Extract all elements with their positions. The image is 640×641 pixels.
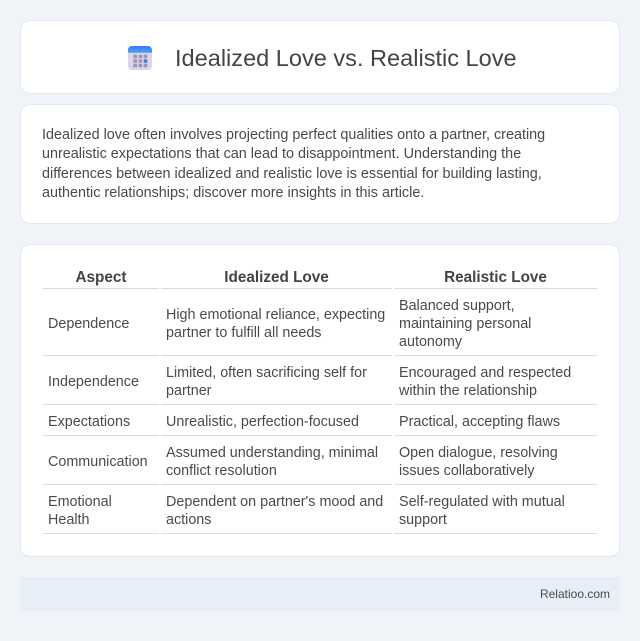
title: Idealized Love vs. Realistic Love	[175, 45, 517, 71]
row: Emotional Health: Dependent on partner's mood and	[166, 494, 383, 510]
icon: calendar	[128, 46, 152, 70]
row: Communication: Open dialogue, resolving	[399, 445, 558, 461]
panel: introduction	[20, 104, 620, 224]
row: Emotional Health: Health	[48, 512, 89, 528]
footer text: Relatioo.com	[540, 587, 610, 601]
row: Dependence: High emotional reliance, expecting	[166, 307, 385, 323]
row: Dependence: Dependence	[48, 316, 129, 332]
row: Independence: Limited, often sacrificing self for	[166, 365, 367, 381]
table heading: Aspect: Aspect	[75, 269, 126, 286]
row: Dependence: partner to fulfill all needs	[166, 325, 321, 341]
row: Independence: Encouraged and respected	[399, 365, 571, 381]
row: Communication	[48, 445, 558, 479]
row: Emotional Health: Self-regulated with mutual	[399, 494, 565, 510]
introduction text	[42, 127, 545, 201]
row: Dependence: maintaining personal	[399, 316, 531, 332]
introduction text: unrealistic expectations that can lead to disappointment. Understanding the	[42, 146, 521, 162]
row: Independence: partner	[166, 383, 211, 399]
footer bar	[20, 577, 620, 611]
row: Emotional Health: actions	[166, 512, 211, 528]
row: Communication: conflict resolution	[166, 463, 277, 479]
row: Expectations	[48, 414, 560, 430]
row: Communication: issues collaboratively	[399, 463, 535, 479]
introduction text: differences between idealized and realistic love is essential for building lasting,	[42, 166, 542, 182]
table heading: Realistic Love: Realistic Love	[444, 269, 547, 286]
row: Expectations: Expectations	[48, 414, 130, 430]
row: Emotional Health: support	[399, 512, 447, 528]
row: Expectations: Practical, accepting flaws	[399, 414, 560, 430]
row: Dependence	[48, 298, 531, 350]
row: Expectations: Unrealistic, perfection-focused	[166, 414, 359, 430]
row: Dependence: autonomy	[399, 334, 462, 350]
row: Emotional Health	[48, 494, 565, 528]
introduction text: authentic relationships; discover more insights in this article.	[42, 185, 424, 201]
row: Communication: Assumed understanding, minimal	[166, 445, 378, 461]
row: Communication: Communication	[48, 454, 148, 470]
panel: title card	[20, 20, 620, 94]
row: Independence	[48, 365, 571, 399]
table heading: Idealized Love: Idealized Love	[224, 269, 329, 286]
introduction text: Idealized love often involves projecting perfect qualities onto a partner, creating	[42, 127, 545, 143]
row: Independence: within the relationship	[399, 383, 537, 399]
row: Dependence: Balanced support,	[399, 298, 515, 314]
panel: comparison table	[20, 244, 620, 557]
row: Independence: Independence	[48, 374, 139, 390]
row: Emotional Health: Emotional	[48, 494, 112, 510]
